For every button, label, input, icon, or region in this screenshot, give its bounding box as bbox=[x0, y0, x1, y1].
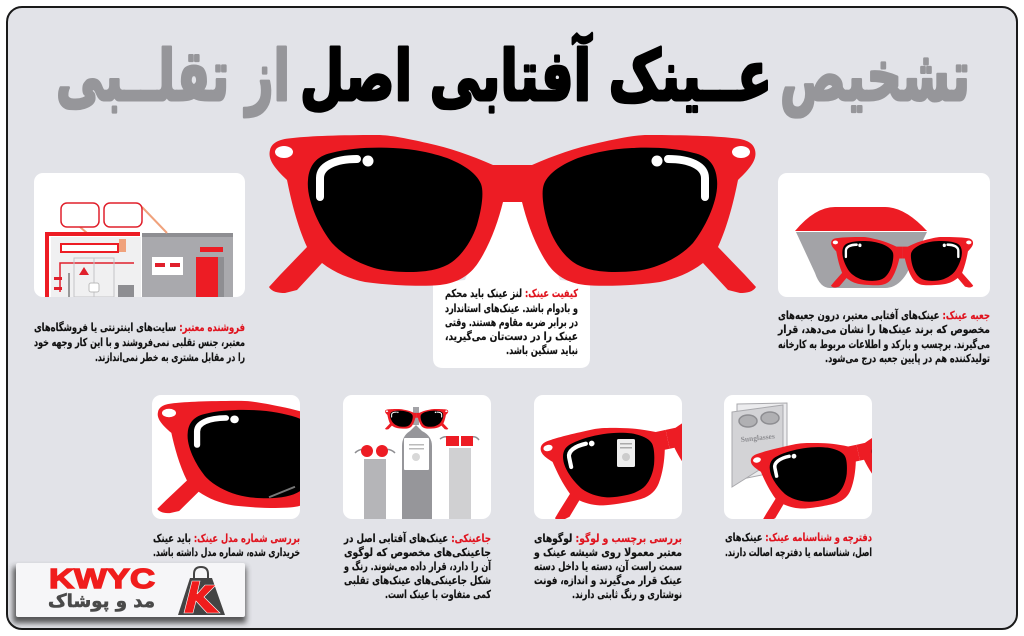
quality text: عینک را در دست‌تان می‌گیرید، bbox=[445, 330, 578, 343]
white callout card bbox=[433, 195, 590, 368]
seller text bbox=[34, 321, 245, 364]
quality text: در برابر ضربه مقاوم هستند. وقتی bbox=[445, 316, 578, 329]
case text: کمی متفاوت با عینک است. bbox=[385, 588, 491, 601]
seller text: معتبر، جنس تقلبی نمی‌فروشند و با این کار وجهه خود bbox=[34, 336, 245, 349]
case text bbox=[343, 531, 491, 601]
model number illustration bbox=[152, 395, 300, 519]
panel: glasses case bbox=[343, 395, 491, 601]
logo text: بررسی برچسب و لوگو: لوگوهای bbox=[534, 532, 682, 545]
box illustration card bbox=[778, 173, 990, 297]
case illustration bbox=[343, 395, 491, 519]
booklet illustration: Sunglasses bbox=[740, 431, 775, 444]
case text: شکل جاعینکی‌های عینک‌های تقلبی bbox=[344, 574, 491, 587]
quality text: نباید سنگین باشد. bbox=[506, 344, 578, 357]
case text: آن را دارد، قرار داده می‌شوند. رنگ و bbox=[343, 559, 491, 573]
box text bbox=[777, 308, 990, 366]
booklet text: دفترچه و شناسنامه عینک: عینک‌های bbox=[725, 531, 872, 544]
title bbox=[56, 33, 970, 118]
seller text: را در مقابل مشتری به خطر نمی‌اندازند. bbox=[95, 351, 245, 364]
case text: جاعینکی‌های مخصوص که لوگوی bbox=[344, 546, 491, 559]
box text: جعبه عینک: عینک‌های آفتابی معتبر، درون جعبه‌های bbox=[778, 308, 990, 322]
booklet text: اصل، شناسنامه یا دفترچه اصالت دارند. bbox=[725, 546, 872, 559]
quality text: و بادوام باشد. عینک‌های استاندارد bbox=[445, 302, 578, 315]
logo text bbox=[533, 532, 682, 601]
icon: shopping bag bbox=[178, 567, 225, 615]
model number text: بررسی شماره مدل عینک: باید عینک bbox=[153, 532, 300, 545]
quality text bbox=[445, 287, 578, 357]
model number text bbox=[153, 532, 300, 559]
panel: booklet bbox=[724, 395, 872, 559]
brand name: KWYC bbox=[49, 563, 155, 594]
panel: lens quality bbox=[269, 135, 756, 368]
seller text: فروشنده معتبر: سایت‌های اینترنتی یا فروشگاه‌های bbox=[34, 321, 245, 334]
brand tagline: مد و پوشاک bbox=[48, 591, 155, 612]
logo text: سمت راست آن، دسته یا داخل دسته bbox=[534, 559, 682, 573]
box text: مخصوص که برند عینک‌ها را نشان می‌دهد، قرار bbox=[777, 323, 990, 336]
panel: glasses box bbox=[777, 173, 990, 366]
panel: model number bbox=[152, 395, 300, 559]
logo text: نوشتاری و رنگ ثابتی دارند. bbox=[572, 587, 682, 601]
title part: gray last words: از تقلــبی bbox=[56, 35, 290, 117]
quality text: کیفیت عینک: لنز عینک باید محکم bbox=[445, 287, 578, 300]
logo text: معتبر معمولا روی شیشه عینک و bbox=[533, 546, 682, 559]
booklet illustration bbox=[724, 395, 872, 519]
panel: trusted seller bbox=[34, 173, 245, 364]
title part: black middle: عــینک آفتابی اصل bbox=[300, 33, 772, 117]
main red sunglasses bbox=[269, 135, 756, 293]
KWYC logo badge bbox=[13, 563, 246, 623]
seller illustration card bbox=[34, 173, 245, 297]
booklet text bbox=[725, 531, 872, 559]
panel: label and logo bbox=[534, 395, 682, 601]
logo text: عینک قرار می‌گیرند و اندازه، فونت bbox=[534, 574, 682, 587]
model number text: خریداری شده، شماره مدل داشته باشد. bbox=[153, 546, 300, 559]
case text: جاعینکی: عینک‌های آفتابی اصل در bbox=[343, 531, 491, 545]
logo illustration bbox=[534, 395, 682, 519]
